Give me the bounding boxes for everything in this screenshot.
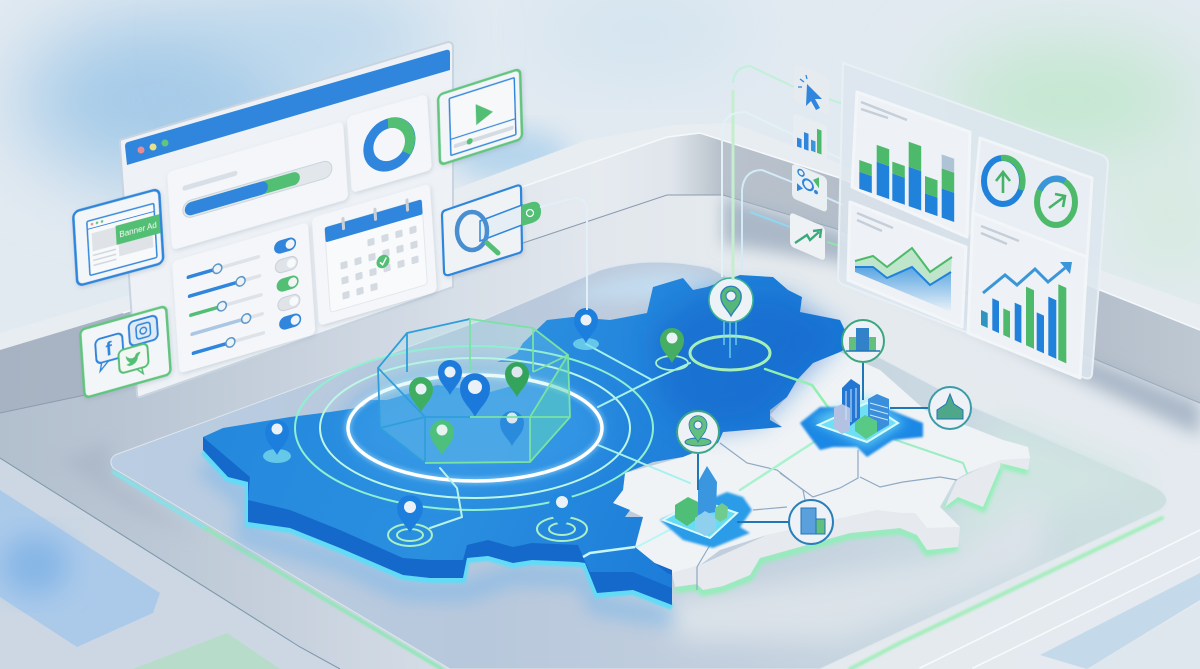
chart card: trend rings <box>973 138 1092 257</box>
pin: blue, back <box>438 360 462 395</box>
pin: blue, front <box>500 411 524 446</box>
green glass block <box>133 633 280 669</box>
badge: civic building <box>929 387 971 429</box>
banner ad label: Banner Ad <box>119 221 157 239</box>
chart card: area lines <box>848 202 966 327</box>
wall: upper rim and shaded face <box>0 123 1200 413</box>
tile: network of customer icons <box>792 163 827 213</box>
location ellipse with pin badge <box>690 278 770 370</box>
floor: lower left rim and blocks <box>0 440 340 669</box>
building: green block left <box>675 497 698 526</box>
light strips along tray edges <box>113 472 1200 669</box>
city hub: south west <box>660 466 752 548</box>
progress card <box>167 121 348 250</box>
search bar with green button <box>480 202 541 241</box>
map: extruded blue region <box>203 275 852 607</box>
chart card: stacked bars <box>852 92 970 237</box>
building: green block right <box>715 503 728 522</box>
map pins on the blue region <box>263 278 770 546</box>
city hub: north east <box>800 379 923 457</box>
pin: green, right <box>505 362 529 397</box>
analytics glass panel <box>838 63 1108 378</box>
tile: click cursor <box>794 65 829 114</box>
social icon: facebook: f <box>105 338 113 361</box>
floating card: social media <box>80 306 171 398</box>
targeting prism with pins inside <box>378 319 570 463</box>
badge: location on map <box>677 411 719 453</box>
network lines connecting the map nodes <box>430 344 967 547</box>
pin marker: south west <box>388 495 432 546</box>
floating card: video player <box>438 69 522 165</box>
map plate: glass tray <box>111 262 1167 669</box>
connectors: badge to analytics tiles <box>722 66 843 280</box>
building: tall blue tower <box>842 379 860 426</box>
blue glass block <box>0 490 160 647</box>
social icon: twitter <box>118 343 149 380</box>
building: green block <box>855 415 877 439</box>
connector: search card to north pin <box>540 198 587 310</box>
pin marker: south <box>537 492 587 541</box>
map: extruded white region <box>613 352 1030 593</box>
floor shading under the wall on the right <box>723 195 1200 436</box>
window title bar <box>125 50 450 165</box>
floor surface <box>0 188 1200 669</box>
badge: hospital building <box>789 500 833 544</box>
pin: green, front <box>430 420 454 455</box>
pin: large blue, centre <box>460 373 490 417</box>
pin marker: north green <box>656 328 688 370</box>
building: spire tower <box>698 466 717 515</box>
window control dots <box>138 140 168 154</box>
calendar card <box>312 184 437 326</box>
slider and toggle card <box>172 222 315 374</box>
floating card: banner ad <box>73 189 163 286</box>
building: striped blue tower <box>868 394 889 432</box>
pin: green, left <box>409 377 433 412</box>
donut card <box>347 94 432 193</box>
plate highlights <box>560 272 1150 640</box>
badge: office buildings <box>842 320 884 362</box>
connectors from city badges <box>698 363 928 522</box>
pin marker: north <box>573 308 599 350</box>
magnifying glass <box>457 212 498 253</box>
building: pale block <box>834 404 850 434</box>
prism wireframe <box>378 319 570 463</box>
building: pale blue block <box>695 511 716 536</box>
floating card: search <box>442 185 541 275</box>
pin marker: west <box>263 420 291 463</box>
tile: small bar chart <box>793 113 827 161</box>
dashboard browser window <box>120 42 453 397</box>
radar rings around the targeted zone <box>295 346 653 510</box>
map: blue cast glow on tray <box>203 465 672 618</box>
chart card: bars with trend arrow <box>968 213 1087 378</box>
tile: trend arrow <box>790 212 825 261</box>
social icon: instagram <box>128 315 158 347</box>
